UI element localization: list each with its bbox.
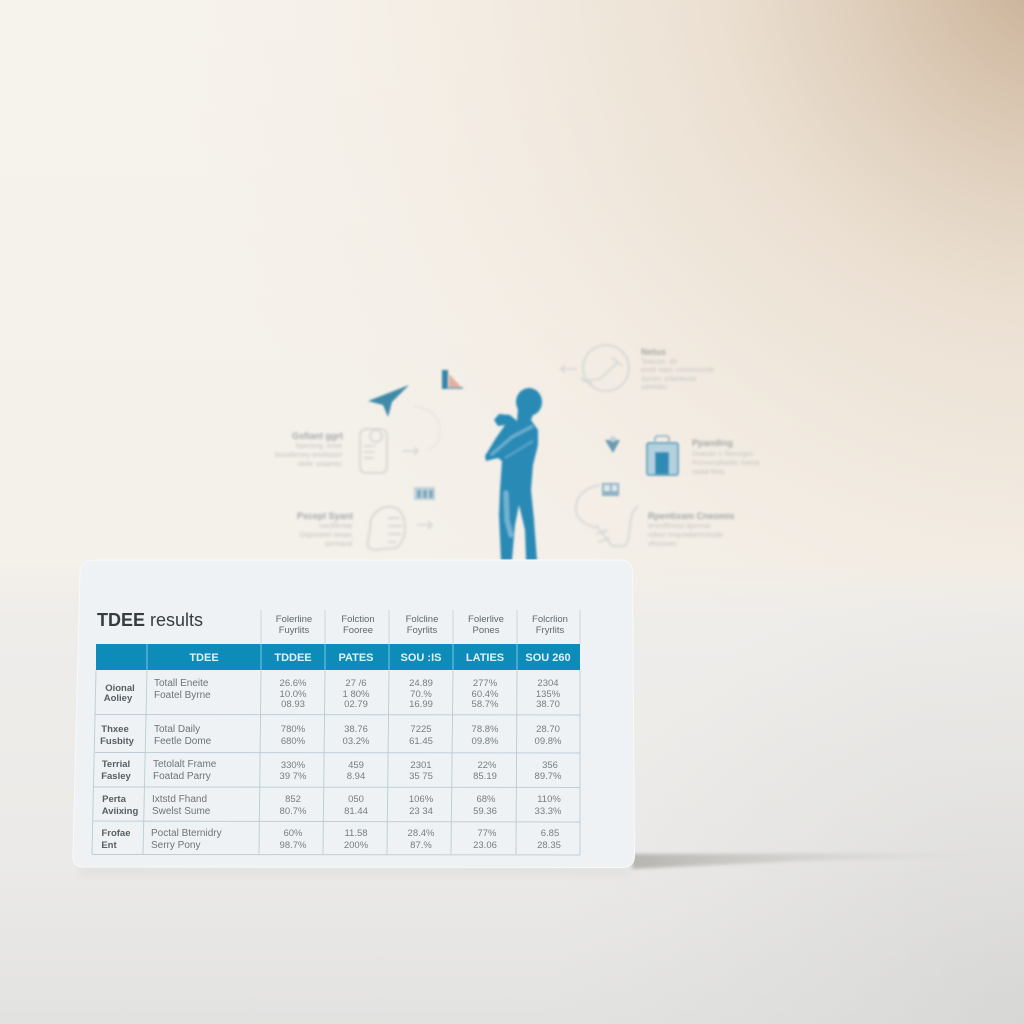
table row 4: 80.7% <box>280 806 307 817</box>
icon: clipboard bag <box>647 436 678 475</box>
table row 5: 87.% <box>410 840 432 851</box>
table row 3: Tetolalt Frame <box>153 759 217 770</box>
table header bar: SOU :IS <box>401 652 441 664</box>
table row 2: 28.70 <box>536 724 560 735</box>
table row 5: Frofae <box>101 828 131 839</box>
table row 4 <box>102 794 562 817</box>
table column headers: Fryrlits <box>536 625 564 636</box>
table row 2: 03.2% <box>343 736 370 747</box>
background floor <box>0 560 1024 1024</box>
table row 3: 459 <box>348 760 364 771</box>
table column headers: Fuyrlits <box>279 625 310 636</box>
table row 3: 2301 <box>410 760 432 771</box>
table row 1: 58.7% <box>472 699 499 710</box>
table row 1: 2304 <box>537 678 559 689</box>
table row 3 <box>101 759 562 782</box>
table row 5: 200% <box>344 840 369 851</box>
table column headers: Folcline <box>406 614 438 625</box>
table column headers: Folction <box>341 614 375 625</box>
table row 5: Serry Pony <box>151 840 200 851</box>
table row 2: 7225 <box>410 724 432 735</box>
table row 1: 24.89 <box>409 678 433 689</box>
figure: thinking person silhouette <box>485 388 542 560</box>
table row 4: 23 34 <box>409 806 433 817</box>
right info block: lower: edteo nmpotalamctoode <box>648 532 723 539</box>
table row 1: 1 80% <box>343 689 370 700</box>
table row 1: Aoliey <box>104 693 133 704</box>
table row 3: 85.19 <box>473 771 497 782</box>
right info block: lower: ohrossen <box>648 541 677 548</box>
table row 2: 38.76 <box>344 724 368 735</box>
table column headers: Folerline <box>276 614 312 625</box>
arrow: lower left <box>417 521 432 529</box>
table row 3: 22% <box>477 760 497 771</box>
table row 1: 70.% <box>410 689 432 700</box>
table row 5: 28.4% <box>408 828 435 839</box>
table row 1: 26.6% <box>280 678 307 689</box>
left info block: lower: sormand <box>325 541 352 548</box>
table row 3: Foatad Parry <box>153 771 211 782</box>
card shadow on floor <box>80 853 1005 876</box>
table row 3: Fasley <box>101 771 132 782</box>
right info block: upper: Sociec sntertecoe <box>641 376 697 383</box>
table row 2: 680% <box>281 736 306 747</box>
left info block: upper <box>275 431 343 468</box>
table row 5: 98.7% <box>280 840 307 851</box>
table row 1 <box>104 678 561 710</box>
table row 5: 11.58 <box>344 828 368 839</box>
table row 1: 60.4% <box>472 689 499 700</box>
table column headers: Folerlive <box>468 614 504 625</box>
table row 4: 33.3% <box>535 806 562 817</box>
left info block: lower: Dopmoeel sesao <box>299 532 352 539</box>
table row 2: 09.8% <box>535 736 562 747</box>
right info block: middle: Ppanding <box>692 438 733 448</box>
table row 4: 59.36 <box>473 806 497 817</box>
table row 2: Thxee <box>101 724 129 735</box>
table row 3: 39 7% <box>280 771 307 782</box>
left info block: lower <box>297 511 353 548</box>
table header bar: TDDEE <box>274 652 312 664</box>
table row 3: 330% <box>281 760 306 771</box>
left info block: lower: eactlfentat <box>320 523 352 530</box>
left info block: upper: beseilemey enelistant <box>275 452 342 459</box>
table row 1: 135% <box>536 689 561 700</box>
table row 1: 16.99 <box>409 699 433 710</box>
icon: small bars <box>414 487 435 500</box>
table row 4: 68% <box>476 794 496 805</box>
heading: TDEE results: TDEE results <box>97 610 203 630</box>
table row 2: Total Daily <box>154 724 200 735</box>
arrow: upper left <box>402 406 440 455</box>
table row 5: 23.06 <box>473 840 497 851</box>
table row 5: 28.35 <box>537 840 561 851</box>
icon: curved pipe outline <box>576 485 638 546</box>
table column headers: Fooree <box>343 625 373 636</box>
table grid <box>92 610 580 855</box>
table row 2: 61.45 <box>409 736 433 747</box>
table row 3: Terrial <box>102 759 130 770</box>
icon: document outline <box>360 429 387 473</box>
panel: results card <box>73 560 635 868</box>
right info block: upper: sateidas <box>641 384 668 391</box>
left info block: upper: Spezeng. ense <box>295 443 342 450</box>
arrow: upper right <box>561 365 577 373</box>
right info block: middle: sadal thea <box>692 469 724 476</box>
table header bar: TDEE <box>189 652 219 664</box>
table row 4: 110% <box>537 794 561 805</box>
table header bar: PATES <box>338 652 374 664</box>
table row 5: 77% <box>477 828 497 839</box>
table row 4: 852 <box>285 794 301 805</box>
right info block: lower: Rpentixam Cneomis <box>648 511 735 521</box>
table row 5: 6.85 <box>541 828 559 839</box>
table column headers: Folcrlion <box>532 614 568 625</box>
right info block: middle: Doasan s Taoceges <box>692 451 754 458</box>
table row 4: 050 <box>348 794 364 805</box>
table row 5: Poctal Bternidry <box>151 828 222 839</box>
right info block: lower <box>648 511 735 548</box>
icon: small chart <box>442 370 463 389</box>
icon: small gem <box>605 436 620 453</box>
table row 5: 60% <box>283 828 303 839</box>
left info block: upper: oeter soaanes <box>298 461 342 468</box>
table row 1: Oional <box>105 683 135 694</box>
left info block: lower: Pxcepl Syant <box>297 511 353 521</box>
right info block: upper: Tetecon. dit <box>641 359 677 366</box>
table column headers <box>276 614 568 636</box>
table row 3: 356 <box>542 760 558 771</box>
table row 1: Totall Eneite <box>154 678 209 689</box>
right info block: upper: eostr eaec conomcente <box>641 367 714 374</box>
table header bar <box>96 644 580 670</box>
right info block: lower: tescoftmoul dpresse <box>648 523 711 530</box>
table row 1: 27 /6 <box>345 678 367 689</box>
table column headers: Foyrlits <box>407 625 438 636</box>
table row 3: 89.7% <box>535 771 562 782</box>
table row 1: 10.0% <box>280 689 307 700</box>
icon: paper plane <box>368 385 409 417</box>
table row 4: Aviixing <box>102 806 138 817</box>
icon: circle diagram <box>580 345 629 391</box>
table row 1: 08.93 <box>281 699 305 710</box>
table row 4: Perta <box>102 794 127 805</box>
right info block: upper: Netus <box>641 347 666 357</box>
table header bar: LATIES <box>466 652 504 664</box>
right info block: upper <box>641 347 714 391</box>
icon: head outline <box>368 507 405 550</box>
table row 1: Foatel Byrne <box>154 690 211 701</box>
table column headers: Pones <box>473 625 500 636</box>
table row 2: Feetle Dome <box>154 736 212 747</box>
left info block: upper: Gxfiant ggrt <box>292 431 343 441</box>
table row 2: Fusbity <box>100 736 135 747</box>
table row 4: Swelst Sume <box>152 806 211 817</box>
table row 2: 09.8% <box>472 736 499 747</box>
table row 4: 81.44 <box>344 806 368 817</box>
table row 4: Ixtstd Fhand <box>152 794 207 805</box>
table row 3: 8.94 <box>347 771 365 782</box>
table row 2 <box>100 724 562 747</box>
table row 1: 38.70 <box>536 699 560 710</box>
table row 2: 78.8% <box>472 724 499 735</box>
icon: small photo tile <box>602 483 619 496</box>
right info block: middle <box>692 438 760 476</box>
table row 3: 35 75 <box>409 771 433 782</box>
right info block: middle: Pormonalwoke meeta <box>692 460 760 467</box>
table row 5: Ent <box>101 840 117 851</box>
table row 2: 780% <box>281 724 306 735</box>
table row 5 <box>101 828 561 851</box>
table row 4: 106% <box>409 794 434 805</box>
table row 1: 277% <box>473 678 498 689</box>
table row 1: 02.79 <box>344 699 368 710</box>
table header bar: SOU 260 <box>525 652 571 664</box>
